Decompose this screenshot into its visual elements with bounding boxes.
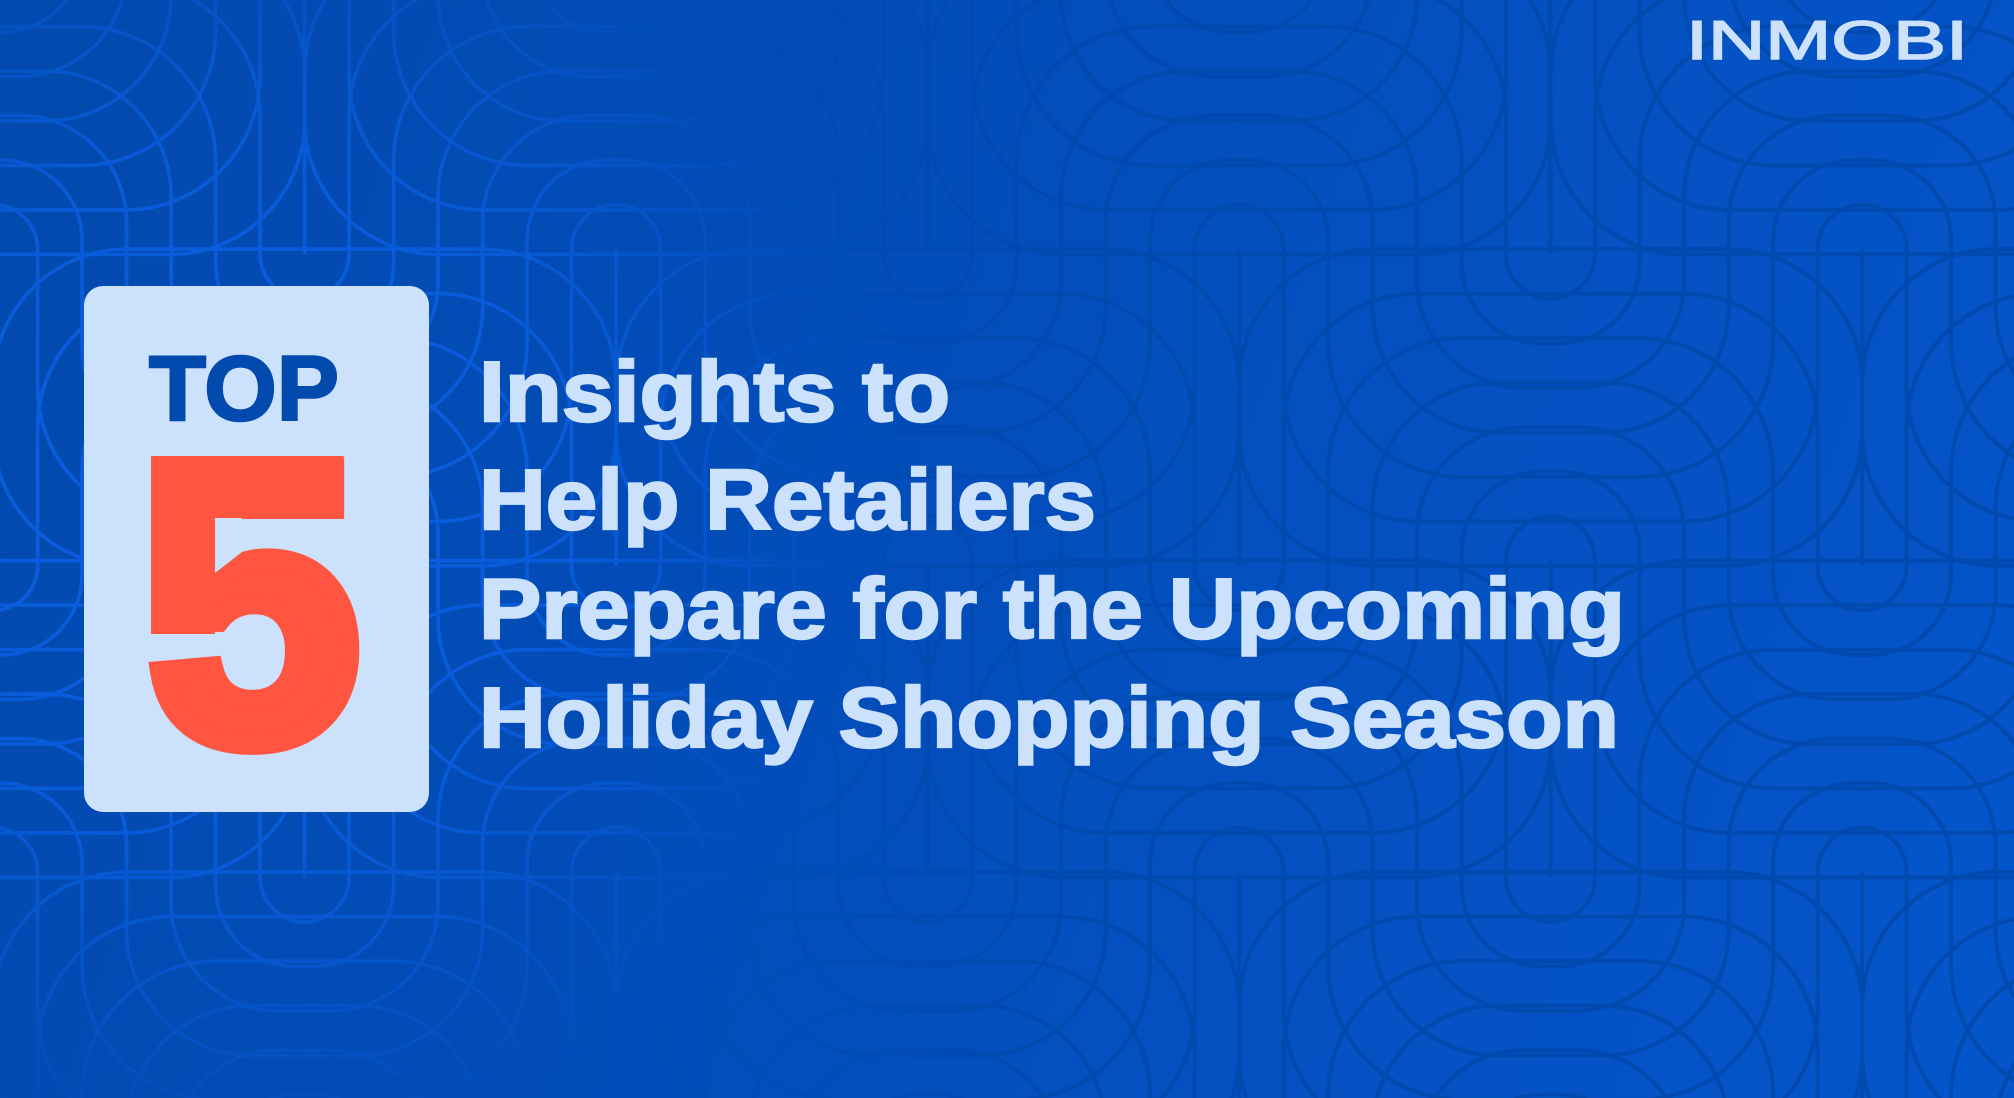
title: Prepare for the Upcoming bbox=[479, 562, 1625, 657]
panel: top 5 card bbox=[84, 286, 429, 825]
title: Help Retailers bbox=[479, 453, 1096, 548]
title: Insights to bbox=[479, 345, 950, 440]
title bbox=[479, 345, 1625, 766]
logo: InMobi: INMOBI bbox=[1686, 9, 1968, 71]
big number 5: 5 bbox=[149, 382, 359, 825]
title: Holiday Shopping Season bbox=[479, 671, 1619, 766]
heading: TOP: TOP bbox=[149, 338, 339, 440]
